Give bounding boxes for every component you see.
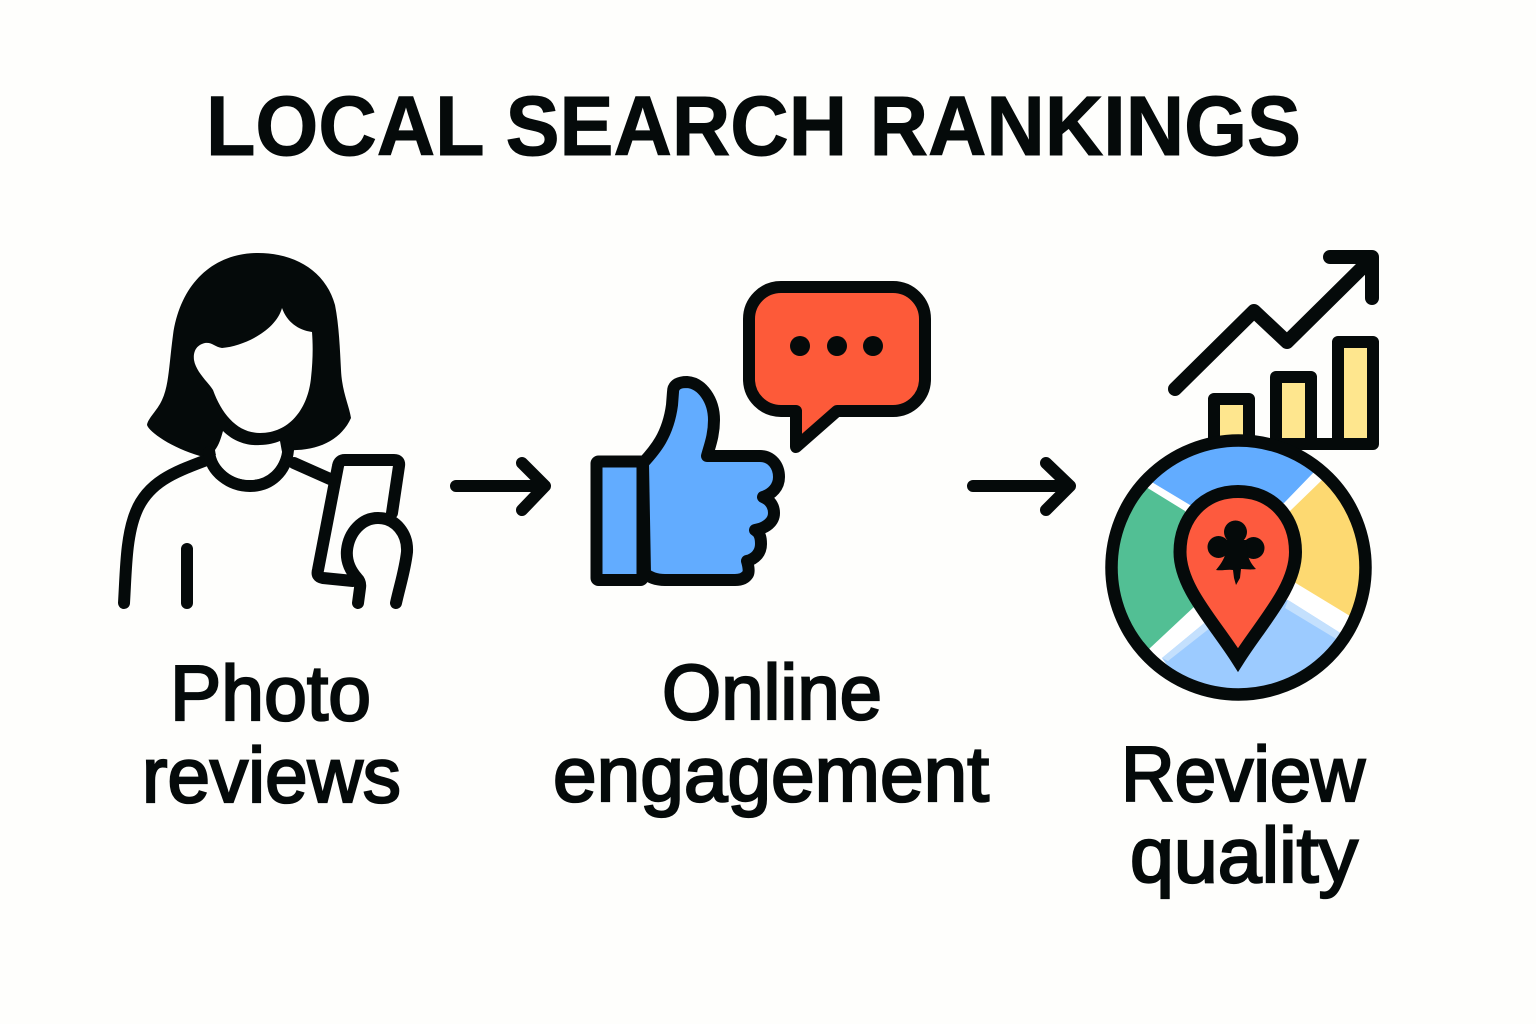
bubble body: [749, 287, 925, 447]
label: Online engagement: engagement: [553, 730, 989, 818]
title: LOCAL SEARCH RANKINGS: [206, 79, 1301, 173]
face: [194, 308, 313, 433]
baseline: [1249, 438, 1373, 450]
infographic canvas: [118, 96, 1379, 900]
pin: [1180, 492, 1296, 660]
label: Review quality: Review: [1121, 730, 1366, 818]
thumb hand: [643, 382, 779, 580]
label: Photo reviews: Photo: [170, 649, 371, 737]
clover emblem: [1208, 520, 1264, 585]
map base: [1112, 440, 1366, 694]
icon: thumbs up: [596, 382, 779, 580]
icon: growth chart: [1175, 257, 1373, 444]
neck: [215, 431, 282, 480]
collar: [209, 450, 288, 486]
arm line: [181, 549, 193, 603]
map sectors: [1118, 446, 1360, 688]
label: Review quality: [1121, 730, 1366, 899]
label: Photo reviews: [142, 649, 401, 819]
arrow: engagement to review quality: [973, 463, 1070, 510]
label: Online engagement: Online: [662, 648, 882, 736]
label: Photo reviews: reviews: [142, 731, 401, 819]
dots: [790, 336, 883, 356]
icon: map pin on circular map: [1100, 440, 1380, 710]
hand: [347, 518, 407, 603]
map ring: [1112, 440, 1366, 694]
left shoulder: [124, 461, 204, 603]
hair: [147, 253, 351, 456]
phone: [318, 460, 399, 581]
icon: speech bubble: [749, 287, 925, 447]
trend arrow: [1175, 257, 1372, 389]
bars: [1214, 342, 1373, 444]
icon: woman holding phone: [124, 253, 407, 603]
cuff: [596, 462, 642, 580]
right shoulder: [294, 463, 330, 479]
arrow: photo reviews to engagement: [456, 463, 545, 510]
label: Online engagement: [553, 648, 989, 818]
label: Review quality: quality: [1130, 811, 1358, 899]
